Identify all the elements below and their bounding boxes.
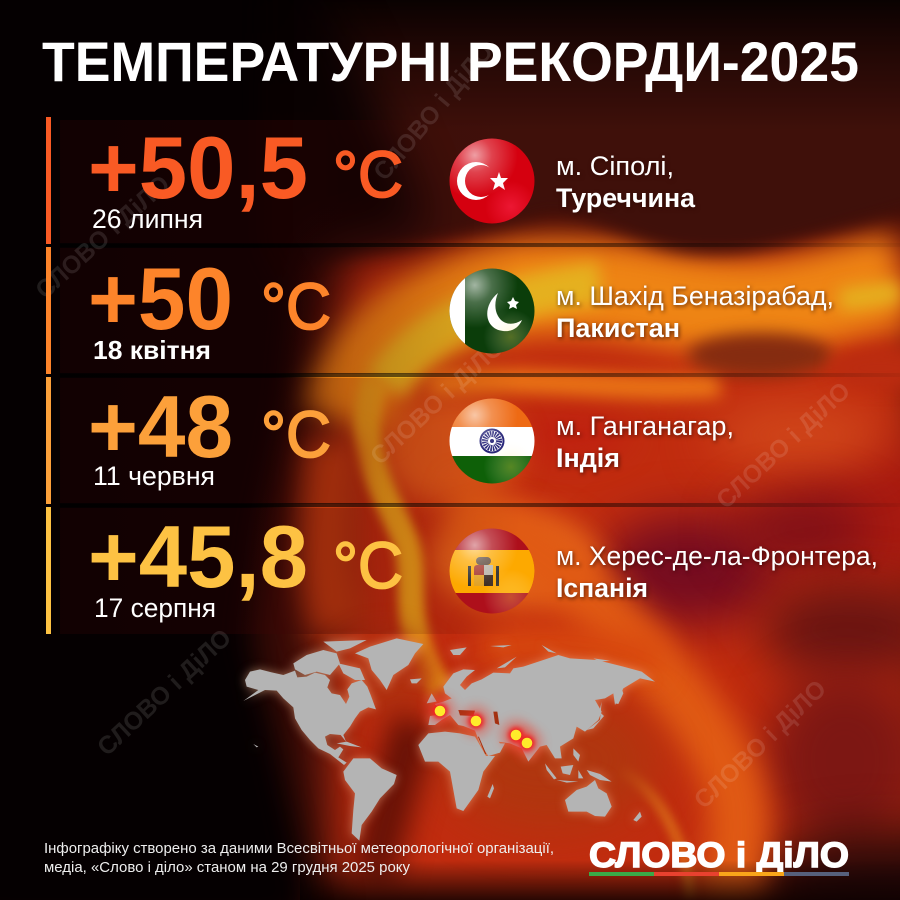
date: 18 квітня <box>93 335 211 365</box>
unit: Celsius: °C <box>333 528 403 602</box>
unit: Celsius: °C <box>261 269 331 343</box>
temperature: +48: +48 <box>88 377 233 476</box>
record row: Spain <box>46 507 878 634</box>
flag: Turkey <box>449 138 535 224</box>
source note <box>44 840 554 876</box>
watermarks: СЛОВО і ДіЛО <box>92 624 237 761</box>
location: м. Сіполі, <box>556 151 674 181</box>
location: м. Шахід Беназірабад, <box>556 281 834 311</box>
date: 26 липня <box>92 204 203 234</box>
temperature: +50: +50 <box>88 249 233 348</box>
country: Пакистан <box>556 313 680 343</box>
date: 11 червня <box>93 461 215 491</box>
flag: Pakistan <box>449 268 535 354</box>
country: Іспанія <box>556 573 648 603</box>
source note: медіа, «Слово і діло» станом на 29 грудня 2025 року <box>44 859 410 876</box>
watermarks: СЛОВО і ДіЛО <box>368 38 499 186</box>
flag: Spain <box>449 528 535 614</box>
background: heat map <box>233 0 900 900</box>
record row: Pakistan <box>46 247 834 374</box>
source note: Інфографіку створено за даними Всесвітньої метеорологічної організації, <box>44 840 554 857</box>
hotspots <box>424 695 543 759</box>
location: м. Херес-де-ла-Фронтера, <box>556 541 878 571</box>
watermarks <box>30 38 856 814</box>
date: 17 серпня <box>94 593 216 623</box>
record row: India <box>46 377 734 504</box>
unit: Celsius: °C <box>333 137 403 211</box>
Americas and Greenland <box>243 638 423 841</box>
flag: India <box>449 398 535 485</box>
temperature: +45,8: +45,8 <box>88 507 308 606</box>
country: Індія <box>556 443 620 473</box>
watermarks: СЛОВО і ДіЛО <box>365 333 510 470</box>
watermarks: СЛОВО і ДіЛО <box>689 675 832 814</box>
watermarks: СЛОВО і ДіЛО <box>30 170 175 304</box>
location: м. Ганганагар, <box>556 411 734 441</box>
unit: Celsius: °C <box>261 397 331 471</box>
country: Туреччина <box>556 183 696 213</box>
world map <box>243 638 655 841</box>
row backgrounds <box>60 120 900 634</box>
record row: Turkey <box>46 117 696 244</box>
watermarks: СЛОВО і ДіЛО <box>711 377 856 514</box>
Eurasia, Africa and Oceania <box>418 645 655 822</box>
temperature: +50,5: +50,5 <box>88 118 308 217</box>
logo: СЛОВО і ДіЛО <box>589 836 849 875</box>
title: ТЕМПЕРАТУРНІ РЕКОРДИ-2025 <box>42 30 859 93</box>
